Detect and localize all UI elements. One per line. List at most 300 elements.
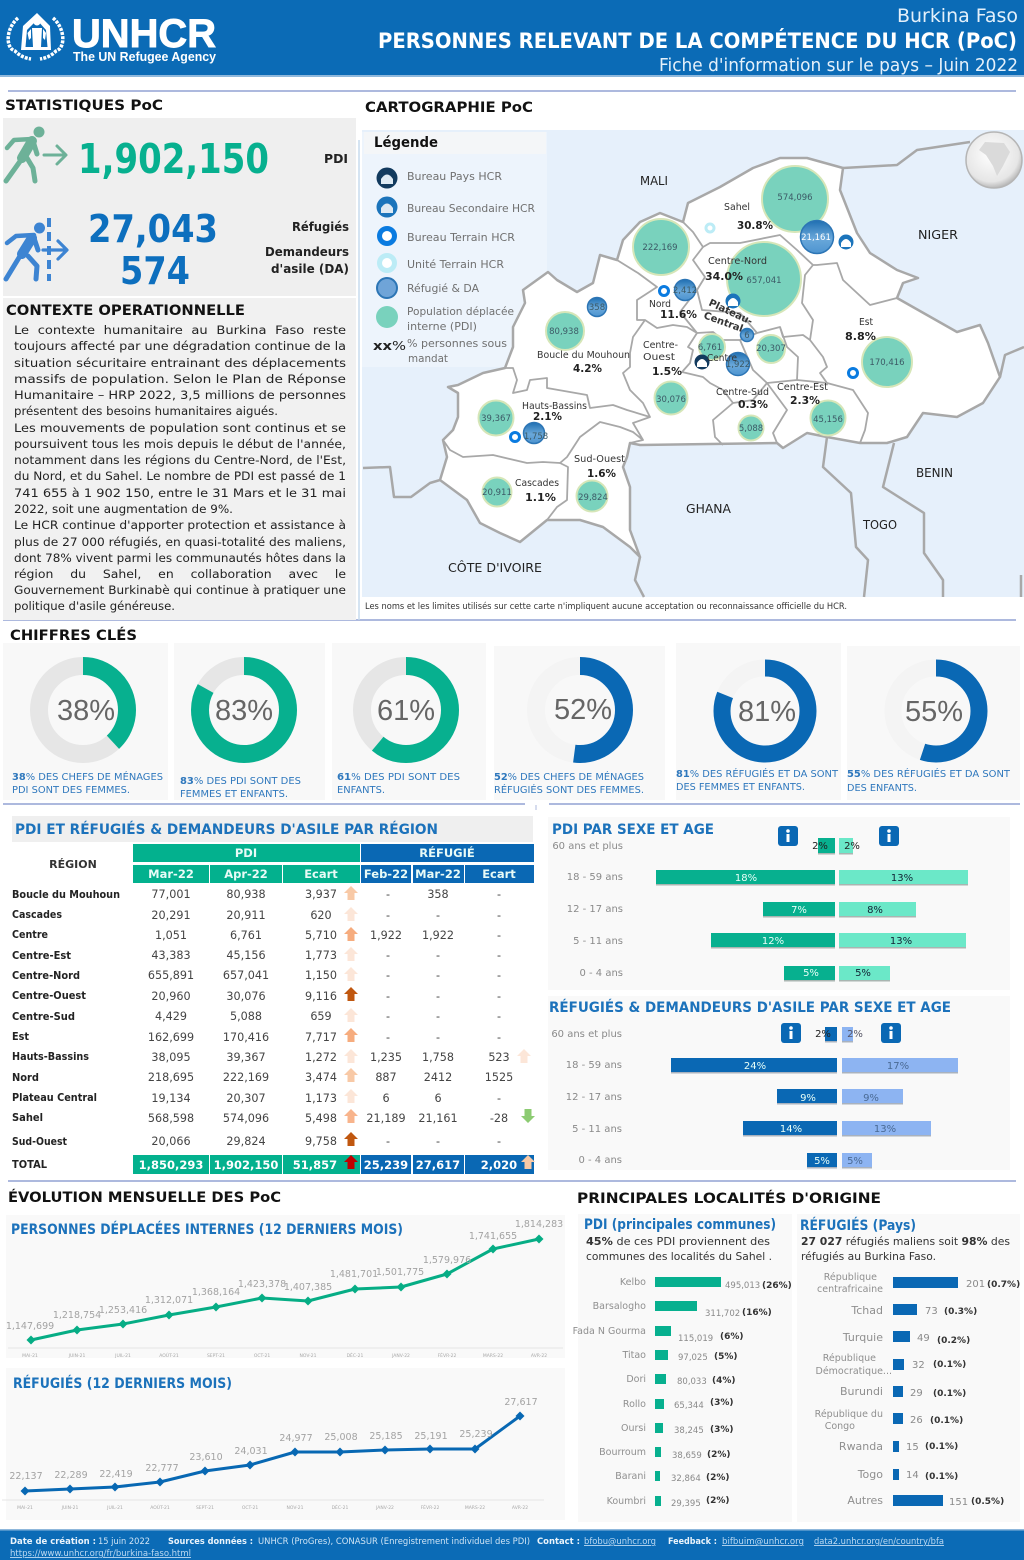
PDI values: 1,407,385 <box>284 1282 332 1293</box>
country values: 73 <box>925 1306 938 1317</box>
table row: Est: - <box>497 1031 501 1044</box>
context paragraph: notamment dans les régions du Centre-Nord, de l'Est, <box>14 453 346 467</box>
table row: Centre-Sud: - <box>386 1010 390 1023</box>
table row: Centre-Nord: 655,891 <box>148 969 194 982</box>
refugee values: 25,008 <box>324 1432 358 1443</box>
legend labels: Bureau Secondaire HCR <box>407 203 535 215</box>
months axis: SEPT-21 <box>196 1505 214 1511</box>
region names and shares: Centre <box>707 353 737 364</box>
commune values: 97,025 <box>678 1353 708 1363</box>
bars female <box>842 1027 958 1167</box>
key figure captions: ENFANTS. <box>337 785 385 796</box>
region names and shares: 4.2% <box>573 363 602 375</box>
context paragraph: région du Sahel, en collaboration avec le <box>14 567 346 581</box>
key figure captions: 55% DES RÉFUGIÉS ET DA SONT <box>847 767 1011 780</box>
region names and shares: 2.1% <box>533 411 562 423</box>
commune values: (2%) <box>706 1473 730 1483</box>
UNHCR logo <box>8 12 217 64</box>
PDI values: 1,579,976 <box>423 1255 471 1266</box>
table row: Sud-Ouest: 20,066 <box>151 1135 191 1148</box>
months axis: MAI-21 <box>17 1505 33 1511</box>
region names and shares: 8.8% <box>845 331 877 343</box>
months axis: JANV-22 <box>391 1353 410 1359</box>
refugee values: 22,777 <box>145 1463 179 1474</box>
age labels: 0 - 4 ans <box>579 968 623 979</box>
bubble values: 45,156 <box>813 415 843 425</box>
region names and shares: Hauts-Bassins <box>522 401 587 412</box>
months axis: JUIL-21 <box>106 1505 123 1511</box>
region names and shares: Centre- <box>643 340 678 351</box>
table header: Mar-22 <box>415 867 461 881</box>
PDI values: 1,253,416 <box>99 1305 147 1316</box>
country labels: TOGO <box>862 518 897 532</box>
legend labels: % <box>392 338 406 353</box>
bars <box>893 1277 958 1506</box>
table row: Est: - <box>436 1031 440 1044</box>
country values: 15 <box>906 1442 919 1453</box>
table row: Centre-Sud: 659 <box>310 1010 332 1023</box>
table row: Hauts-Bassins <box>12 1049 531 1064</box>
age labels: 12 - 17 ans <box>567 904 623 915</box>
bar values: 8% <box>867 905 883 916</box>
country labels: Autres <box>847 1494 883 1507</box>
bar values: 7% <box>791 905 807 916</box>
context paragraph: poursuivent tous les mois depuis le début de l'année, <box>14 437 346 451</box>
country values <box>906 1279 1020 1508</box>
table row: Sahel: Sahel <box>12 1112 43 1124</box>
bubble values: 1,922 <box>726 360 750 370</box>
commune values: 115,019 <box>678 1334 713 1344</box>
footer <box>0 1529 1024 1560</box>
country values: (0.1%) <box>930 1416 963 1426</box>
refugee values: 27,617 <box>504 1397 538 1408</box>
region names and shares: 2.3% <box>790 395 820 407</box>
country values: (0.7%) <box>987 1280 1020 1290</box>
table header: Ecart <box>482 867 516 881</box>
commune values: (26%) <box>762 1281 792 1291</box>
PDI values: 1,218,754 <box>53 1310 101 1321</box>
country labels: République du <box>815 1409 883 1420</box>
panel: contexte opérationnelle <box>3 298 356 620</box>
table row: Sahel: 21,161 <box>418 1112 458 1125</box>
panel description: 27 027 réfugiés maliens soit 98% des <box>801 1235 1010 1248</box>
table row: Cascades: 20,911 <box>226 909 266 922</box>
bubble values: 657,041 <box>746 276 782 286</box>
table row: Plateau Central: 6 <box>434 1092 442 1105</box>
PDI values: 1,368,164 <box>192 1287 240 1298</box>
commune labels: Rollo <box>623 1399 646 1410</box>
country values: (0.3%) <box>944 1307 977 1317</box>
table header: RÉFUGIÉ <box>419 845 475 860</box>
refugee values: 22,137 <box>9 1471 43 1482</box>
footer: https://www.unhcr.org/fr/burkina-faso.html <box>10 1549 191 1559</box>
region names and shares: Plateau- <box>707 298 754 328</box>
commune values: (2%) <box>706 1496 730 1506</box>
donut: 61% <box>362 666 450 754</box>
region names and shares: Centre-Est <box>777 382 828 393</box>
table row: Centre-Nord: - <box>436 969 440 982</box>
context paragraph: dont 78% vivent parmi les communautés hôtes dans la <box>14 551 346 565</box>
region names and shares: 34.0% <box>705 271 743 283</box>
table row: Centre-Sud: 5,088 <box>230 1010 262 1023</box>
panel description <box>586 1235 772 1263</box>
PDI values <box>6 1219 563 1332</box>
commune values: 32,864 <box>671 1474 701 1484</box>
bar values: 13% <box>874 1124 896 1135</box>
table row: Centre: 1,922 <box>370 929 402 942</box>
commune values: 311,702 <box>705 1309 740 1319</box>
table row: Sud-Ouest: 9,758 <box>305 1135 337 1148</box>
bar values: 5% <box>803 968 819 979</box>
legend labels: mandat <box>408 353 448 365</box>
donut: 52% <box>536 666 624 754</box>
context paragraph: situation sécuritaire entrainant des déplacements <box>14 356 346 370</box>
country labels: MALI <box>640 174 668 188</box>
commune values: (6%) <box>720 1332 744 1342</box>
footer: Contact : <box>537 1537 580 1547</box>
months axis: MARS-22 <box>483 1353 503 1359</box>
months axis: JUIN-21 <box>68 1353 85 1359</box>
legend content <box>373 135 535 365</box>
donut: 55% <box>893 668 979 754</box>
commune labels: Dori <box>626 1374 646 1385</box>
bar values <box>744 1029 909 1167</box>
country values: 14 <box>906 1470 919 1481</box>
bubble values: 222,169 <box>642 243 678 253</box>
months axis: DÉC-21 <box>332 1503 349 1511</box>
bar values: 2% <box>847 1029 863 1040</box>
table row: Centre-Est: 45,156 <box>226 949 266 962</box>
table row: Centre: 6,761 <box>230 929 262 942</box>
table row: Boucle du Mouhoun: 3,937 <box>305 888 337 901</box>
table row: Centre-Nord <box>12 967 501 982</box>
bubble values: 21,161 <box>801 233 831 243</box>
table row: total: 25,239 <box>364 1158 408 1172</box>
PDI values: 1,481,701 <box>330 1269 378 1280</box>
bubble values: 29,824 <box>578 493 608 503</box>
commune labels <box>573 1277 646 1507</box>
table header: Mar-22 <box>148 867 194 881</box>
bubbles: internally displaced population <box>478 166 912 512</box>
bar values: 13% <box>890 936 912 947</box>
table row: Centre: 1,922 <box>422 929 454 942</box>
footer: 15 juin 2022 <box>98 1537 150 1547</box>
commune labels: Barsalogho <box>593 1301 646 1312</box>
legend title: Légende <box>374 135 438 151</box>
age labels <box>552 841 623 979</box>
months axis: AOÛT-21 <box>150 1504 170 1511</box>
country labels <box>815 1272 892 1507</box>
panel title: RÉFUGIÉS (Pays) <box>800 1217 916 1234</box>
country labels: Congo <box>825 1421 855 1432</box>
bubble values: 80,938 <box>549 327 579 337</box>
table row: Boucle du Mouhoun: 80,938 <box>226 888 266 901</box>
donut: 38%: 38% <box>57 695 115 727</box>
PDI values: 1,312,071 <box>145 1295 193 1306</box>
country labels: Turquie <box>842 1331 883 1344</box>
months axis: SEPT-21 <box>207 1353 225 1359</box>
key figure captions: FEMMES ET ENFANTS. <box>180 789 288 800</box>
legend labels: Bureau Pays HCR <box>407 171 502 183</box>
table row: Sahel: -28 <box>490 1112 508 1125</box>
refugee values: 25,185 <box>369 1431 403 1442</box>
refugee labels: d'asile (DA) <box>271 262 349 276</box>
country values: 32 <box>912 1360 925 1371</box>
table row: total: 1,902,150 <box>214 1158 278 1172</box>
table header: Apr-22 <box>224 867 268 881</box>
donut: 38% <box>39 666 127 754</box>
UNHCR logo: UNHCR <box>72 12 216 56</box>
office markers <box>510 224 858 442</box>
icons: male and female <box>781 1023 901 1043</box>
region names and shares: Nord <box>649 299 671 310</box>
bar values: 17% <box>887 1061 909 1072</box>
chart title: RÉFUGIÉS & DEMANDEURS D'ASILE PAR SEXE ET AGE <box>549 999 951 1016</box>
commune values: (2%) <box>707 1450 731 1460</box>
heading: principales localités: PRINCIPALES LOCALITÉS D'ORIGINE <box>577 1190 881 1207</box>
bubble values: 1,758 <box>524 432 548 442</box>
refugee line <box>25 1416 520 1491</box>
bubble values: 20,307 <box>756 344 786 354</box>
table row: Hauts-Bassins: 39,367 <box>226 1051 266 1064</box>
table row: Sud-Ouest: 29,824 <box>226 1135 266 1148</box>
commune values: (5%) <box>714 1352 738 1362</box>
bar values: 24% <box>744 1061 766 1072</box>
table row: Nord: 222,169 <box>223 1071 269 1084</box>
chart title: PERSONNES DÉPLACÉES INTERNES (12 DERNIERS MOIS) <box>11 1221 403 1238</box>
months axis: OCT-21 <box>254 1353 270 1359</box>
heading: statistiques: STATISTIQUES PoC <box>5 98 163 114</box>
icons: male and female <box>778 826 899 846</box>
map panel <box>362 130 1024 597</box>
line chart: réfugiés <box>2 1368 565 1520</box>
country values: (0.1%) <box>933 1360 966 1370</box>
refugee values: 23,610 <box>189 1452 223 1463</box>
legend labels: interne (PDI) <box>407 321 477 333</box>
commune labels: Titao <box>621 1350 646 1361</box>
icon: refugee crossing border <box>6 218 67 281</box>
table row: Centre <box>12 927 501 942</box>
commune values: (4%) <box>712 1376 736 1386</box>
PDI values: 1,814,283 <box>515 1219 563 1230</box>
donut: 81% <box>722 668 808 754</box>
table row: Sud-Ouest: Sud-Ouest <box>12 1136 67 1148</box>
header titles <box>378 5 1018 76</box>
bubble values: 30,076 <box>656 395 686 405</box>
donut: 55%: 55% <box>905 696 963 728</box>
context paragraph: politique d'asile généreuse. <box>14 599 175 613</box>
table header: Ecart <box>304 867 338 881</box>
line chart: PDI <box>6 1215 565 1359</box>
table row: Nord: 218,695 <box>148 1071 194 1084</box>
country values: 29 <box>910 1388 923 1399</box>
refugee values: 24,031 <box>234 1446 268 1457</box>
donut: 83%: 83% <box>215 695 273 727</box>
context paragraph: Le HCR continue d'apporter protection et assistance à <box>14 518 346 532</box>
bar values: 2% <box>844 841 860 852</box>
table row: total <box>12 1155 535 1174</box>
table row: Centre-Ouest: - <box>386 990 390 1003</box>
bars male <box>656 838 835 980</box>
panel: PDI origins <box>573 1214 792 1522</box>
bubble values: 6,761 <box>698 343 722 353</box>
table row: Centre-Est: Centre-Est <box>12 950 71 962</box>
key figure captions: 81% DES RÉFUGIÉS ET DA SONT <box>676 767 839 780</box>
Burkina Faso territory <box>440 158 1000 557</box>
bubble values: 6 <box>744 331 750 341</box>
country values: (0.5%) <box>971 1497 1004 1507</box>
table row: Sud-Ouest: - <box>386 1135 390 1148</box>
bar values: 9% <box>800 1093 816 1104</box>
bar values <box>735 841 913 979</box>
table row: Centre-Ouest: - <box>436 990 440 1003</box>
donut: 52%: 52% <box>554 694 612 726</box>
table row: Plateau Central: 1,173 <box>305 1092 337 1105</box>
country labels: Burundi <box>840 1385 883 1398</box>
table row: Plateau Central <box>12 1089 501 1105</box>
bars male <box>671 1027 837 1167</box>
table row: Est: 162,699 <box>148 1031 194 1044</box>
months axis: AOÛT-21 <box>159 1352 179 1359</box>
table row: Hauts-Bassins: 523 <box>488 1051 510 1064</box>
table row: Sahel: 5,498 <box>305 1112 337 1125</box>
table row: Centre-Sud: Centre-Sud <box>12 1011 75 1023</box>
bar values: 9% <box>863 1093 879 1104</box>
PDI values: 1,423,378 <box>238 1279 286 1290</box>
bars female <box>839 838 968 980</box>
footer: UNHCR (ProGres), CONASUR (Enregistrement individuel des PDI) <box>258 1537 530 1547</box>
table header <box>49 844 534 883</box>
table row: Plateau Central: 19,134 <box>151 1092 191 1105</box>
table row: Centre: - <box>497 929 501 942</box>
footer: Feedback : <box>668 1537 717 1547</box>
context paragraph: Le contexte humanitaire au Burkina Faso reste <box>14 323 346 337</box>
region names and shares: 1.1% <box>525 492 557 504</box>
country labels: Tchad <box>850 1304 883 1317</box>
bar values: 14% <box>780 1124 802 1135</box>
region names and shares: Boucle du Mouhoun <box>537 350 630 361</box>
country labels: République <box>823 1353 876 1364</box>
chart title: RÉFUGIÉS (12 DERNIERS MOIS) <box>13 1375 232 1392</box>
country values: (0.2%) <box>937 1336 970 1346</box>
bar values: 12% <box>762 936 784 947</box>
age labels: 18 - 59 ans <box>566 1060 622 1071</box>
table row: Centre-Sud: - <box>497 1010 501 1023</box>
heading: évolution mensuelle: ÉVOLUTION MENSUELLE DES PoC <box>8 1189 281 1206</box>
age labels: 0 - 4 ans <box>578 1155 622 1166</box>
refugee labels <box>265 220 349 276</box>
commune labels: Koumbri <box>607 1496 646 1507</box>
country labels <box>448 174 958 575</box>
context paragraph: Gouvernement Burkinabè qui continue à pratiquer une <box>14 583 346 597</box>
table row: Plateau Central: 20,307 <box>226 1092 266 1105</box>
region names and shares: Est <box>859 317 873 328</box>
legend labels: xx <box>373 338 392 353</box>
commune values: 38,245 <box>674 1426 704 1436</box>
table row: Centre-Est: 1,773 <box>305 949 337 962</box>
table row: Centre-Sud: 4,429 <box>155 1010 187 1023</box>
table row: Sud-Ouest: - <box>497 1135 501 1148</box>
table row: Est: 7,717 <box>305 1031 337 1044</box>
panel title: PDI (principales communes) <box>584 1217 776 1233</box>
age labels: 5 - 11 ans <box>572 1124 622 1135</box>
bubble values: 170,416 <box>869 358 905 368</box>
country labels: Togo <box>857 1468 883 1481</box>
table row: Sahel: 21,189 <box>366 1112 406 1125</box>
table row: Cascades: - <box>386 909 390 922</box>
table row: Plateau Central: - <box>497 1092 501 1105</box>
months axis: NOV-21 <box>286 1505 304 1511</box>
key figure captions: 52% DES CHEFS DE MÉNAGES <box>494 770 644 783</box>
header banner <box>0 0 1024 77</box>
bars <box>655 1277 721 1506</box>
table row: Sahel <box>12 1109 535 1125</box>
table row: Nord <box>12 1068 513 1084</box>
footer: bfobu@unhcr.org <box>584 1537 656 1547</box>
region boundaries <box>443 222 897 520</box>
table row: Est: Est <box>12 1031 29 1043</box>
commune values: 38,659 <box>672 1451 702 1461</box>
months axis <box>22 1351 547 1359</box>
bar values: 5% <box>855 968 871 979</box>
months axis: AVR-22 <box>531 1353 547 1359</box>
key figure captions: 83% DES PDI SONT DES <box>180 776 301 787</box>
table row: Nord: Nord <box>12 1072 39 1084</box>
commune values: (3%) <box>710 1425 734 1435</box>
months axis: MAI-21 <box>22 1353 38 1359</box>
age labels: 60 ans et plus <box>552 841 623 852</box>
table row: Nord: 1525 <box>485 1071 513 1084</box>
panel: key figures <box>3 643 1020 800</box>
region names and shares: Sahel <box>724 202 750 213</box>
UNHCR logo: The UN Refugee Agency <box>73 49 217 64</box>
key figure captions: RÉFUGIÉS SONT DES FEMMES. <box>494 783 644 796</box>
bar values: 5% <box>814 1156 830 1167</box>
months axis <box>17 1503 528 1511</box>
context paragraph: 2022, soit une augmentation de 9%. <box>14 502 233 516</box>
region names and shares: 1.6% <box>587 468 616 480</box>
table row: Hauts-Bassins: 38,095 <box>151 1051 191 1064</box>
table row: total: 1,850,293 <box>139 1158 203 1172</box>
age labels <box>551 1029 622 1166</box>
table row: Boucle du Mouhoun: - <box>497 888 501 901</box>
context paragraph: du Nord, et du Sahel. Le nombre de PDI est passé de 1 <box>14 469 346 483</box>
table row: Centre: Centre <box>12 929 48 941</box>
context paragraph: toujours affecté par une dégradation continue de la <box>14 339 346 353</box>
heading: chiffres clés: CHIFFRES CLÉS <box>10 627 137 644</box>
key figure captions <box>12 767 1011 800</box>
commune values: 29,395 <box>671 1499 701 1509</box>
months axis: OCT-21 <box>242 1505 258 1511</box>
table row: Centre-Nord: 657,041 <box>223 969 269 982</box>
table row: Cascades: Cascades <box>12 909 62 921</box>
months axis: JUIN-21 <box>61 1505 78 1511</box>
bubble values: 20,911 <box>482 488 512 498</box>
bar values: 13% <box>891 873 913 884</box>
legend labels: % personnes sous <box>407 338 507 350</box>
country labels: Démocratique... <box>816 1366 892 1377</box>
context paragraph: massifs de population. Selon le Plan de Réponse <box>14 372 346 386</box>
country values: (0.1%) <box>925 1442 958 1452</box>
table row: Sud-Ouest: - <box>436 1135 440 1148</box>
PDI values: 1,147,699 <box>6 1321 54 1332</box>
table row: Centre-Est: - <box>386 949 390 962</box>
icon: globe <box>966 132 1022 188</box>
commune labels: Oursi <box>621 1423 646 1434</box>
PDI figure: 1,902,150 <box>78 135 269 183</box>
commune values: 495,013 <box>725 1281 760 1291</box>
chart title: PDI PAR SEXE ET AGE <box>552 822 714 838</box>
